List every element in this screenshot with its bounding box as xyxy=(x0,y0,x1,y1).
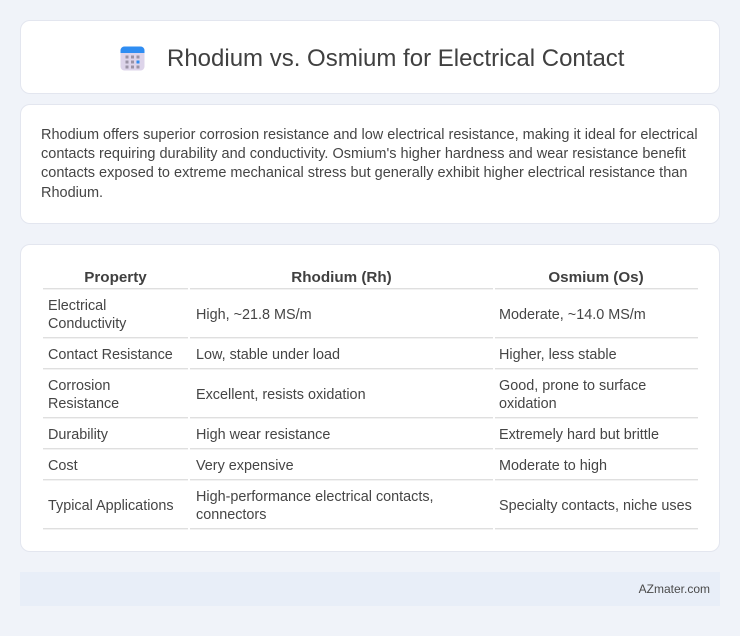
row: Typical Applications: High-performance electrical contacts, xyxy=(196,489,434,505)
row: Contact Resistance xyxy=(48,347,617,363)
row: Contact Resistance: Higher, less stable xyxy=(499,347,617,363)
text block: summary: contacts exposed to extreme mechanical stress but generally exhibit higher electrical resistance than xyxy=(41,165,687,181)
row: Cost: Very expensive xyxy=(196,458,294,474)
row: Corrosion Resistance: Excellent, resists oxidation xyxy=(196,387,366,403)
row: Corrosion Resistance: oxidation xyxy=(499,396,557,412)
row: Cost xyxy=(48,458,607,474)
row: Corrosion Resistance: Resistance xyxy=(48,396,119,412)
footer bar xyxy=(20,572,720,606)
table header: Property: Property xyxy=(84,269,147,286)
panel: title card xyxy=(20,20,720,94)
row: Electrical Conductivity xyxy=(48,298,646,332)
table header: Rhodium: Rhodium (Rh) xyxy=(291,269,392,286)
row: Durability: Extremely hard but brittle xyxy=(499,427,659,443)
footer credit: AZmater.com xyxy=(639,582,710,596)
row: Electrical Conductivity: High, ~21.8 MS/m xyxy=(196,307,312,323)
row: Typical Applications xyxy=(48,489,692,523)
icon: calendar xyxy=(120,46,144,70)
row: Cost: Moderate to high xyxy=(499,458,607,474)
row: Cost: Cost xyxy=(48,458,78,474)
row: Durability: High wear resistance xyxy=(196,427,330,443)
row: Durability xyxy=(48,427,659,443)
row: Electrical Conductivity: Conductivity xyxy=(48,316,126,332)
table header: Osmium: Osmium (Os) xyxy=(548,269,644,286)
panel: comparison table xyxy=(20,244,720,552)
text block: summary: Rhodium. xyxy=(41,185,103,201)
row: Electrical Conductivity: Electrical xyxy=(48,298,106,314)
row: Contact Resistance: Contact Resistance xyxy=(48,347,173,363)
row: Contact Resistance: Low, stable under load xyxy=(196,347,340,363)
panel: summary text xyxy=(20,104,720,224)
row: Corrosion Resistance xyxy=(48,378,646,412)
row: Durability: Durability xyxy=(48,427,108,443)
row: Electrical Conductivity: Moderate, ~14.0 MS/m xyxy=(499,307,646,323)
row: Typical Applications: Typical Applications xyxy=(48,498,174,514)
row: Corrosion Resistance: Corrosion xyxy=(48,378,110,394)
text block: summary: Rhodium offers superior corrosion resistance and low electrical resistance, making it ideal for electrical xyxy=(41,127,698,143)
row: Typical Applications: Specialty contacts, niche uses xyxy=(499,498,692,514)
text block: summary: contacts requiring durability and conductivity. Osmium's higher hardness and wear resistance benefit xyxy=(41,146,686,162)
text block: summary xyxy=(41,127,698,201)
row: Typical Applications: connectors xyxy=(196,507,266,523)
title: Rhodium vs. Osmium for Electrical Contact xyxy=(167,45,624,72)
row: Corrosion Resistance: Good, prone to surface xyxy=(499,378,646,394)
